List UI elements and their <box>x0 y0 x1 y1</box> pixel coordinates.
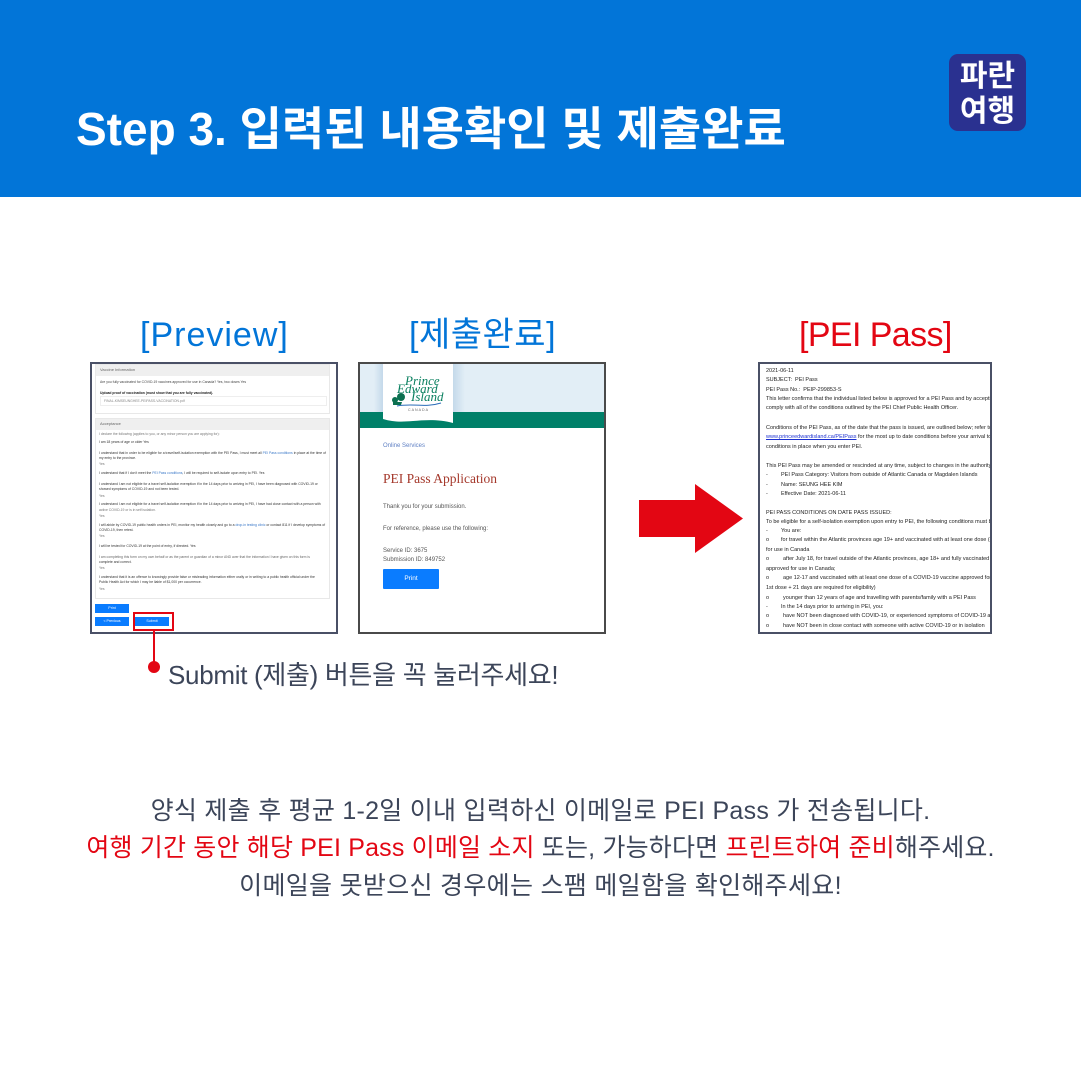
previous button <box>95 617 129 626</box>
application heading: PEI Pass Application <box>383 471 497 486</box>
panel: preview screenshot <box>90 362 338 634</box>
letter text: PEI Pass No.: PEIP-299853-S <box>766 387 842 393</box>
note line 1: 양식 제출 후 평균 1-2일 이내 입력하신 이메일로 PEI Pass 가 전송됩니다. <box>151 797 930 825</box>
letter text: 2021-06-11 <box>766 368 794 374</box>
acceptance statements: active COVID-19 or is in self isolation. <box>99 508 156 512</box>
acceptance statements: I understand I am not eligible for a travel self-isolation exemption if in the 14 days prior to arriving in PEI, I have had close contact with a person with <box>99 502 321 506</box>
letter text: younger than 12 years of age and travelling with parents/family with a PEI Pass <box>783 595 976 601</box>
letter text: o <box>766 613 769 619</box>
acceptance statements: Yes <box>99 566 105 570</box>
acceptance statements: Yes <box>99 494 105 498</box>
print button <box>95 604 129 613</box>
logo badge <box>949 54 1026 131</box>
letter text: Conditions of the PEI Pass, as of the date that the pass is issued, are outlined below; refer to <box>766 425 990 431</box>
letter text: o <box>766 556 769 562</box>
confirmation text: Thank you for your submission. <box>383 504 466 510</box>
acceptance statements: my entry to the province. <box>99 456 136 460</box>
submit button: Submit <box>146 619 158 623</box>
callout text: Submit (제출) 버튼을 꼭 눌러주세요! <box>168 660 558 690</box>
breadcrumb: Online Services <box>383 443 425 449</box>
panel: PEI Pass letter <box>758 362 992 634</box>
letter text: To be eligible for a self-isolation exemption upon entry to PEI, the following conditions must be <box>766 519 990 525</box>
letter text: for use in Canada <box>766 547 809 553</box>
letter text <box>766 368 990 634</box>
letter text: Effective Date: 2021-06-11 <box>781 491 846 497</box>
confirmation text: Service ID: 3675 <box>383 548 427 554</box>
arrow <box>639 484 743 553</box>
confirmation text: Submission ID: 849752 <box>383 557 445 563</box>
acceptance card <box>95 418 330 599</box>
letter text: You are: <box>781 528 801 534</box>
confirmation text <box>383 504 488 563</box>
vaccine information card <box>95 364 330 414</box>
acceptance statements: Yes <box>99 534 105 538</box>
letter text: o <box>766 537 769 543</box>
acceptance statements: I am completing this form on my own behalf or as the parent or guardian of a minor AND aver that the information I have given on this form is <box>99 555 310 559</box>
print button <box>383 569 439 589</box>
acceptance statements: showed symptoms of COVID-19 and not been tested. <box>99 487 179 491</box>
letter text: In the 14 days prior to arriving in PEI, you: <box>781 604 883 610</box>
letter text: PEI PASS CONDITIONS ON DATE PASS ISSUED: <box>766 510 892 516</box>
panel: submission complete screenshot <box>358 362 606 634</box>
vaccine information card: Vaccine Information <box>100 367 135 372</box>
previous button: < Previous <box>103 619 121 623</box>
acceptance statements: Public Health Act for which I may be liable of $1,000 per occurrence. <box>99 580 202 584</box>
PEI logo: Edward <box>396 381 438 396</box>
acceptance statements: I declare the following (applies to you, or any minor person you are applying for): <box>99 432 220 436</box>
letter text: This letter confirms that the individual listed below is approved for a PEI Pass and by accepting <box>766 396 990 402</box>
acceptance statements <box>99 432 326 591</box>
acceptance statements: I understand that it is an offence to knowingly provide false or misleading information either orally or in writing to a public health official under the <box>99 575 315 579</box>
letter text: o <box>766 595 769 601</box>
acceptance statements: I understand that in order to be eligible for a travel/self-isolation exemption with the PEI Pass, I must meet all PEI Pass conditions in place at the time of <box>99 451 326 455</box>
acceptance card: Acceptance <box>100 421 121 426</box>
vaccine information card: Upload proof of vaccination (must show that you are fully vaccinated). <box>100 391 213 395</box>
callout dot <box>148 661 160 673</box>
confirmation text: For reference, please use the following: <box>383 526 488 532</box>
letter text: - <box>766 482 768 488</box>
PEI logo: Prince <box>404 373 440 388</box>
acceptance statements: I will abide by COVID-19 public health orders in PEI, monitor my health closely and go to a drop-in testing clinic or contact 811 if I develop symptoms of <box>99 523 325 527</box>
submit button <box>135 617 169 626</box>
logo badge: 파란 <box>960 60 1015 93</box>
site banner <box>360 364 604 428</box>
print button: Print <box>108 606 116 610</box>
letter text: - <box>766 604 768 610</box>
acceptance statements: Yes <box>99 514 105 518</box>
heading: PEI Pass: [PEI Pass] <box>799 316 952 354</box>
acceptance statements: I will be tested for COVID-19 at the point of entry, if directed. Yes <box>99 544 196 548</box>
PEI logo: CANADA <box>408 408 429 412</box>
acceptance statements: complete and correct. <box>99 560 132 564</box>
acceptance statements: I am 18 years of age or older Yes <box>99 440 149 444</box>
title: Step 3. 입력된 내용확인 및 제출완료 <box>76 103 786 155</box>
PEI logo: Island <box>410 389 444 404</box>
letter text: o <box>766 623 769 629</box>
letter text: - <box>766 472 768 478</box>
vaccine information card: Are you fully vaccinated for COVID-19 vaccines approved for use in Canada? Yes, two doses Yes <box>100 380 246 384</box>
header band <box>0 0 1081 197</box>
logo badge: 여행 <box>960 95 1015 128</box>
acceptance statements: Yes <box>99 587 105 591</box>
letter text: conditions in place when you enter PEI. <box>766 444 862 450</box>
print button: Print <box>404 575 418 582</box>
acceptance statements: COVID-19, then retest. <box>99 528 134 532</box>
letter text: - <box>766 491 768 497</box>
letter text: Name: SEUNG HEE KIM <box>781 482 842 488</box>
letter text: comply with all of the conditions outlined by the PEI Chief Public Health Officer. <box>766 405 958 411</box>
letter text: 1st dose + 21 days are required for eligibility) <box>766 585 876 591</box>
acceptance statements: Yes <box>99 462 105 466</box>
vaccine information card: FINAL-KIMSEUNGHEE-PEIPASS-VACCINATION.pdf <box>104 399 185 403</box>
letter text: have NOT been in close contact with someone with active COVID-19 or in isolation <box>783 623 985 629</box>
letter text: - <box>766 528 768 534</box>
letter text: o <box>766 575 769 581</box>
note line 2: 여행 기간 동안 해당 PEI Pass 이메일 소지 또는, 가능하다면 프린트하여 준비해주세요. <box>86 834 995 862</box>
letter text: SUBJECT: PEI Pass <box>766 377 818 383</box>
submit highlight box <box>133 612 174 631</box>
letter text: approved for use in Canada; <box>766 566 835 572</box>
callout leader line <box>153 631 155 667</box>
acceptance statements: I understand that if I don't meet the PEI Pass conditions, I will be required to self-isolate upon entry to PEI. Yes <box>99 471 264 475</box>
note line 3: 이메일을 못받으신 경우에는 스팸 메일함을 확인해주세요! <box>239 872 842 900</box>
heading: preview: [Preview] <box>140 316 289 354</box>
heading: submission complete: [제출완료] <box>409 316 556 354</box>
acceptance statements: I understand I am not eligible for a travel self-isolation exemption if in the 14 days prior to arriving in PEI, I have been diagnosed with COVID-19 or <box>99 482 318 486</box>
letter text: PEI Pass Category: Visitors from outside of Atlantic Canada or Magdalen Islands <box>781 472 977 478</box>
PEI logo <box>383 364 453 423</box>
